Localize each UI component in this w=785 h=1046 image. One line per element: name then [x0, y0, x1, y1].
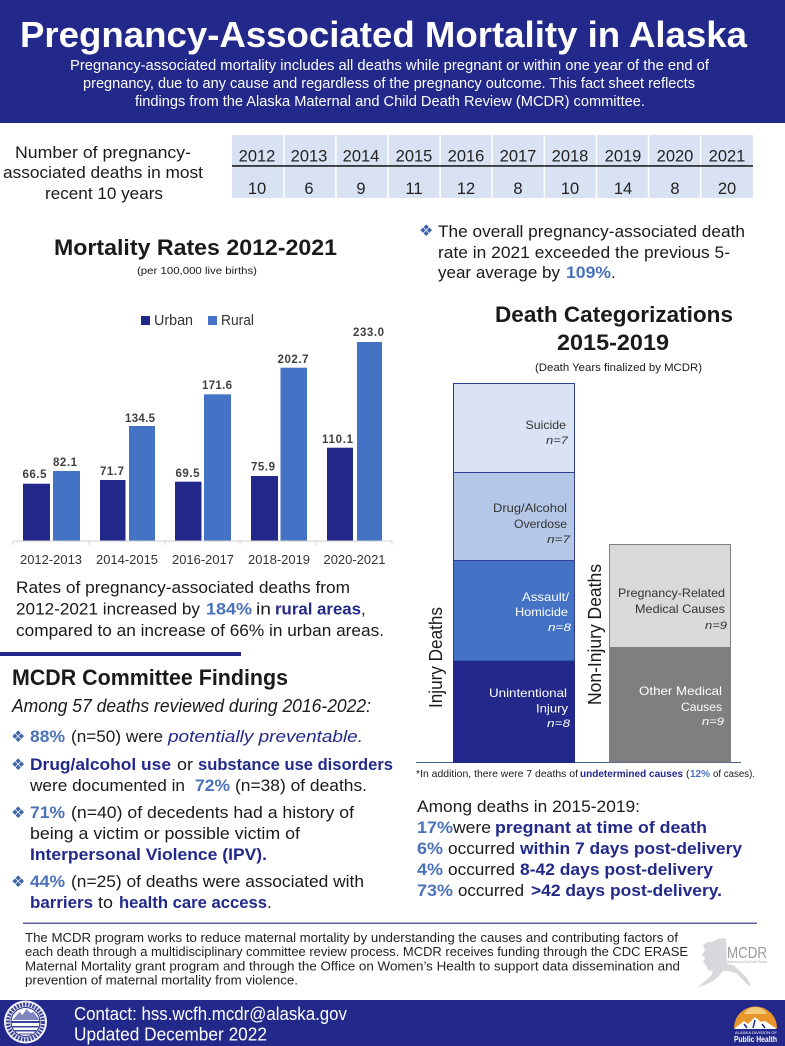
text: rate increase summary: [16, 578, 384, 640]
text: timing of deaths: [417, 797, 743, 900]
deaths per year table: 12: [457, 180, 475, 198]
text: rate increase summary: 2012-2021 increased by: [16, 600, 200, 618]
footnote: undetermined causes: [416, 768, 755, 780]
finding: substance use: 72%: [195, 776, 230, 795]
text: timing of deaths: within 7 days post-delivery: [519, 839, 743, 858]
callout: 2021 rate: The overall pregnancy-associated death: [438, 222, 745, 241]
bar chart: mortality rates: 2016-2017: [172, 553, 234, 567]
segment: pregnancy-related: Medical Causes: [635, 602, 725, 616]
bar chart: mortality rates: 69.5: [176, 468, 200, 480]
heading: mortality rates: Mortality Rates 2012-2021: [54, 235, 337, 260]
finding: health care barriers: to: [98, 893, 113, 912]
deaths per year table: 2020: [657, 148, 693, 166]
finding: preventable: [11, 727, 363, 746]
text: timing of deaths: occurred: [448, 839, 515, 858]
chart legend: [141, 313, 254, 329]
text: rate increase summary: rural areas: [275, 600, 361, 618]
intro text: [70, 57, 710, 110]
segment: homicide: n=8: [548, 622, 572, 634]
text: timing of deaths: 6%: [417, 839, 443, 858]
deaths table caption: [3, 143, 203, 203]
text: rate increase summary: ,: [361, 600, 366, 618]
text: timing of deaths: >42 days post-delivery.: [531, 881, 722, 900]
segment: other medical: Causes: [681, 700, 722, 714]
text: timing of deaths: Among deaths in 2015-2019:: [417, 797, 640, 816]
finding: preventable: 88%: [30, 727, 65, 746]
segment: homicide: Assault/: [522, 590, 570, 604]
segment: overdose: Drug/Alcohol: [493, 501, 567, 515]
finding: health care barriers: 44%: [30, 872, 65, 891]
deaths per year table: [232, 135, 753, 198]
deaths per year table: 8: [670, 180, 680, 198]
icon: public health logo: [734, 1006, 778, 1044]
segment: unintentional injury: Unintentional: [489, 686, 567, 700]
deaths per year table: 2012: [239, 148, 275, 166]
panel: committee findings: [0, 652, 393, 912]
bar chart: mortality rates: 71.7: [100, 466, 124, 478]
bar chart: mortality rates: 2012-2013: [20, 553, 82, 567]
finding: preventable: (n=50) were: [71, 727, 163, 746]
finding: interpersonal violence: Interpersonal Violence (IPV).: [30, 845, 267, 864]
finding: interpersonal violence: being a victim or possible victim of: [30, 824, 300, 843]
footnote: undetermined causes: of cases).: [713, 768, 755, 780]
callout: 2021 rate: ❖: [419, 221, 433, 240]
text: timing of deaths: occurred: [448, 860, 515, 879]
deaths per year table: 10: [561, 180, 579, 198]
finding: substance use: (n=38) of deaths.: [235, 776, 367, 795]
updated date: Updated December 2022: [74, 1024, 267, 1044]
intro text: findings from the Alaska Maternal and Child Death Review (MCDR) committee.: [135, 93, 645, 110]
segment: suicide: n=7: [546, 435, 569, 447]
axis label: non-injury deaths: Non-Injury Deaths: [585, 564, 605, 705]
segment: overdose: n=7: [547, 534, 571, 546]
finding: preventable: potentially preventable.: [167, 727, 363, 746]
footnote: undetermined causes: (: [686, 768, 690, 780]
segment: other medical: Other Medical: [639, 684, 722, 698]
text: timing of deaths: occurred: [458, 881, 524, 900]
finding: interpersonal violence: ❖: [11, 803, 25, 822]
text: program description: [25, 931, 688, 988]
icon: MCDR Alaska logo: MCDR: [727, 945, 767, 962]
segment: overdose: [454, 472, 574, 560]
deaths per year table: 8: [513, 180, 523, 198]
deaths per year table: 2021: [709, 148, 745, 166]
deaths per year table: 2016: [448, 148, 484, 166]
segment: unintentional injury: Injury: [536, 702, 568, 716]
bar chart: mortality rates: 233.0: [353, 327, 384, 339]
deaths per year table: 6: [304, 180, 314, 198]
bar chart: mortality rates: 82.1: [53, 457, 78, 469]
finding: substance use: substance use disorders: [198, 755, 393, 774]
deaths table caption: associated deaths in most: [3, 163, 203, 182]
callout: 2021 rate: [419, 221, 745, 282]
icon: MCDR Alaska logo: Maternal and Child Death Review: [727, 960, 767, 964]
finding: health care barriers: .: [267, 893, 272, 912]
callout: 2021 rate: 109%: [566, 263, 611, 282]
deaths per year table: 2017: [500, 148, 536, 166]
finding: interpersonal violence: (n=40) of decedents had a history of: [71, 803, 354, 822]
subheading: deaths reviewed: Among 57 deaths reviewed during 2016-2022:: [11, 696, 371, 716]
text: timing of deaths: 4%: [417, 860, 443, 879]
text: rate increase summary: Rates of pregnancy-associated deaths from: [16, 578, 350, 597]
bar chart: mortality rates: 2014-2015: [96, 553, 158, 567]
text: rate increase summary: 184%: [206, 600, 252, 618]
title: Pregnancy-Associated Mortality in Alaska: [20, 14, 748, 55]
icon: MCDR Alaska logo: [698, 938, 767, 987]
heading: death categorizations: [495, 302, 733, 355]
deaths per year table: 2019: [605, 148, 641, 166]
segment: overdose: Overdose: [514, 517, 567, 531]
segment: suicide: Suicide: [526, 418, 566, 432]
deaths per year table: 2018: [552, 148, 588, 166]
axis label: injury deaths: Injury Deaths: [426, 607, 446, 708]
intro text: Pregnancy-associated mortality includes all deaths while pregnant or within one year of the end of: [70, 57, 710, 74]
heading: death categorizations: Death Categorizations: [495, 302, 733, 327]
bar chart: mortality rates: 134.5: [125, 413, 156, 425]
deaths per year table: 10: [248, 180, 266, 198]
bar chart: mortality rates: [13, 313, 392, 567]
text: timing of deaths: 8-42 days post-delivery: [520, 860, 714, 879]
footnote: undetermined causes: *In addition, there were 7 deaths of: [416, 768, 578, 780]
footnote: undetermined causes: 12%: [690, 768, 711, 780]
finding: interpersonal violence: [11, 803, 354, 864]
deaths per year table: 2014: [343, 148, 379, 166]
bar chart: mortality rates: 171.6: [202, 380, 232, 392]
text: timing of deaths: 17%: [417, 818, 453, 837]
finding: health care barriers: ❖: [11, 872, 25, 891]
footer banner: [0, 1000, 785, 1046]
text: timing of deaths: 73%: [417, 881, 453, 900]
deaths table caption: Number of pregnancy-: [15, 143, 191, 162]
chart legend: Rural: [221, 313, 254, 329]
segment: pregnancy-related: n=9: [705, 620, 727, 632]
text: program description: The MCDR program works to reduce maternal mortality by understanding the causes and contributing factors of: [25, 931, 679, 945]
bar chart: mortality rates: 66.5: [22, 469, 47, 481]
bar chart: mortality rates: 75.9: [251, 462, 275, 474]
finding: substance use: or: [177, 755, 193, 774]
deaths per year table: 2013: [291, 148, 327, 166]
deaths per year table: 9: [356, 180, 366, 198]
header banner: [0, 0, 785, 123]
callout: 2021 rate: year average by: [438, 263, 560, 282]
finding: interpersonal violence: 71%: [30, 803, 65, 822]
bar chart: mortality rates: 202.7: [278, 354, 308, 366]
text: program description: each death through a multidisciplinary committee review process. MCDR receives funding through the CDC ERASE: [25, 945, 688, 959]
finding: preventable: ❖: [11, 727, 25, 746]
finding: health care barriers: barriers: [30, 893, 93, 912]
finding: substance use: [11, 755, 393, 795]
segment: homicide: [454, 560, 574, 661]
text: program description: Maternal Mortality grant program and through the Office on Women’s Health to support data dissemination and: [25, 960, 680, 974]
deaths per year table: 14: [614, 180, 632, 198]
segment: unintentional injury: n=8: [547, 718, 571, 730]
finding: substance use: ❖: [11, 755, 25, 774]
text: rate increase summary: compared to an increase of 66% in urban areas.: [16, 621, 384, 640]
text: timing of deaths: were: [452, 818, 491, 837]
segment: pregnancy-related: Pregnancy-Related: [618, 586, 725, 600]
contact text: Contact: hss.wcfh.mcdr@alaska.gov: [74, 1004, 347, 1024]
footnote: undetermined causes: undetermined causes: [580, 768, 683, 780]
finding: health care barriers: (n=25) of deaths were associated with: [71, 872, 364, 891]
bar chart: mortality rates: 2018-2019: [248, 553, 310, 567]
chart legend: Urban: [154, 313, 193, 329]
callout: 2021 rate: rate in 2021 exceeded the previous 5-: [438, 243, 730, 262]
text: program description: prevention of maternal mortality from violence.: [25, 974, 298, 988]
segment: suicide: [454, 384, 574, 472]
text: rate increase summary: in: [256, 600, 271, 618]
segment: homicide: Homicide: [515, 605, 568, 619]
finding: substance use: were documented in: [29, 776, 185, 795]
intro text: pregnancy, due to any cause and regardless of the pregnancy outcome. This fact sheet reflects: [83, 75, 695, 92]
text: timing of deaths: pregnant at time of death: [495, 818, 707, 837]
deaths per year table: 20: [718, 180, 736, 198]
segment: other medical: n=9: [702, 716, 724, 728]
finding: health care barriers: health care access: [119, 893, 267, 912]
heading: death categorizations: 2015-2019: [557, 330, 669, 355]
segment: pregnancy-related: [610, 544, 730, 648]
deaths per year table: 2015: [396, 148, 432, 166]
deaths per year table: 11: [405, 180, 423, 198]
subheading: per live births: (per 100,000 live births): [137, 266, 257, 277]
subheading: death years: (Death Years finalized by MCDR): [535, 362, 702, 374]
heading: findings: MCDR Committee Findings: [12, 665, 288, 690]
segment: other medical: [609, 648, 731, 762]
deaths table caption: recent 10 years: [45, 184, 163, 203]
finding: substance use: Drug/alcohol use: [30, 755, 171, 774]
segment: unintentional injury: [453, 661, 575, 763]
bar chart: mortality rates: 2020-2021: [324, 553, 386, 567]
icon: state seal: [4, 1000, 47, 1044]
callout: 2021 rate: .: [611, 263, 616, 282]
bar chart: mortality rates: 110.1: [322, 434, 354, 446]
finding: health care barriers: [11, 872, 364, 912]
icon: public health logo: ALASKA DIVISION OF: [735, 1030, 778, 1035]
stacked chart: death categories: [416, 384, 741, 763]
